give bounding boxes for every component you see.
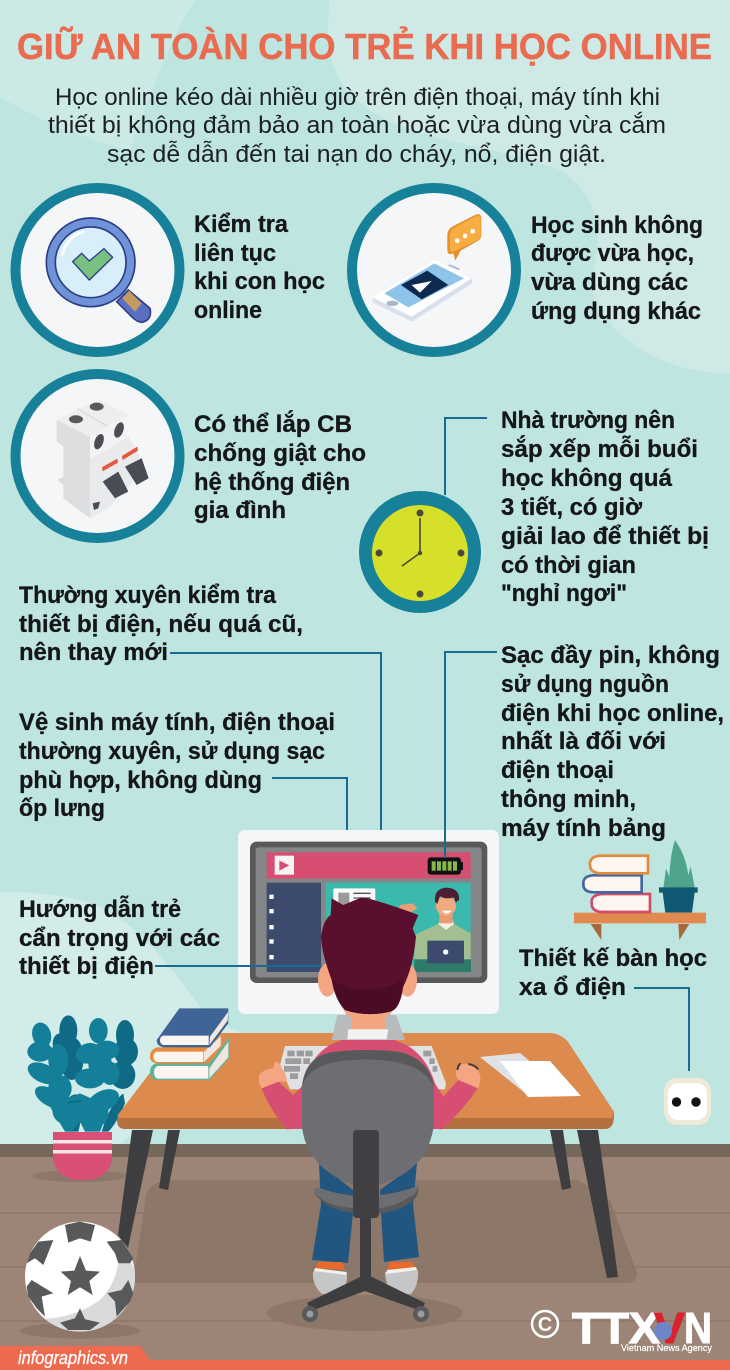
text: school schedule: "nghỉ ngơi" bbox=[501, 580, 627, 607]
logo: TTXVN: TTX bbox=[572, 1304, 660, 1353]
chair seat bbox=[314, 1186, 418, 1213]
text: charge battery: Sạc đầy pin, không bbox=[501, 642, 720, 669]
panel: check continuously bbox=[16, 188, 180, 352]
intro paragraph: Học online kéo dài nhiều giờ trên điện thoại, máy tính khi bbox=[55, 84, 660, 111]
icon: magnifying glass bbox=[46, 218, 151, 322]
text: clean devices: Vệ sinh máy tính, điện thoại bbox=[19, 709, 335, 736]
jeans bbox=[312, 1163, 419, 1263]
logo: TTXVN: Vietnam News Agency bbox=[621, 1343, 712, 1353]
icon: keyboard bbox=[280, 1046, 446, 1089]
text: check continuously: liên tục bbox=[194, 240, 276, 267]
text: check continuously: khi con học bbox=[194, 268, 325, 295]
text: school schedule: học không quá bbox=[501, 465, 673, 492]
icon: books on desk bbox=[150, 1008, 229, 1080]
icon: soccer ball bbox=[20, 1222, 140, 1339]
text: school schedule: giải lao để thiết bị bbox=[501, 523, 709, 550]
text: phone apps bbox=[531, 212, 703, 325]
shirt and arms bbox=[259, 1037, 480, 1129]
chair shadow bbox=[267, 1295, 463, 1331]
connectors bbox=[155, 652, 689, 1071]
text: guide children: cẩn trọng với các bbox=[19, 925, 220, 952]
logo: TTXVN: N bbox=[684, 1304, 712, 1353]
floor bbox=[0, 1144, 730, 1360]
chair back bbox=[302, 1050, 434, 1218]
text: charge battery: điện khi học online, bbox=[501, 700, 724, 727]
source label: infographics.vn bbox=[18, 1348, 128, 1368]
text: charge battery: máy tính bảng bbox=[501, 815, 666, 842]
text: desk away from socket: Thiết kế bàn học bbox=[519, 945, 707, 972]
video: teacher bbox=[333, 888, 471, 972]
text: phone apps: được vừa học, bbox=[531, 240, 694, 267]
text: clean devices: ốp lưng bbox=[19, 795, 105, 822]
footer bar bbox=[0, 1346, 730, 1370]
shoes bbox=[313, 1262, 418, 1294]
panel: phone apps bbox=[352, 188, 516, 352]
text: clean devices: thường xuyên, sử dụng sạc bbox=[19, 738, 325, 765]
icon: circuit breaker bbox=[57, 400, 149, 518]
text: guide children: thiết bị điện bbox=[19, 953, 154, 980]
logo: TTXVN bbox=[532, 1304, 712, 1353]
icon: clock bbox=[359, 491, 481, 613]
text: guide children: Hướng dẫn trẻ bbox=[19, 895, 181, 923]
text: circuit breaker: hệ thống điện bbox=[194, 469, 350, 496]
icon: potted plant bbox=[24, 1015, 138, 1182]
text: charge battery: nhất là đối với bbox=[501, 728, 666, 755]
text: circuit breaker: gia đình bbox=[194, 497, 286, 524]
student bbox=[259, 897, 480, 1331]
text: phone apps: Học sinh không bbox=[531, 212, 703, 239]
text: desk away from socket bbox=[519, 945, 707, 1001]
text: clean devices bbox=[19, 709, 335, 822]
text: check equipment bbox=[19, 582, 303, 666]
head bbox=[318, 897, 418, 1040]
text: check continuously bbox=[194, 211, 325, 324]
text: phone apps: ứng dụng khác bbox=[531, 298, 701, 325]
text: school schedule: sắp xếp mỗi buổi bbox=[501, 435, 698, 463]
text: check equipment: thiết bị điện, nếu quá cũ, bbox=[19, 611, 303, 638]
icon: battery bbox=[428, 857, 463, 875]
title: GIỮ AN TOÀN CHO TRẺ KHI HỌC ONLINE bbox=[17, 25, 712, 67]
text: school schedule bbox=[501, 407, 709, 607]
icon: wall shelf with books and plant bbox=[574, 840, 706, 940]
intro paragraph: sạc dễ dẫn đến tai nạn do cháy, nổ, điện giật. bbox=[107, 141, 606, 168]
text: charge battery: thông minh, bbox=[501, 786, 636, 813]
icon: papers on desk bbox=[480, 1053, 581, 1097]
panel: circuit breaker bbox=[16, 374, 180, 538]
icon: wall socket bbox=[664, 1078, 711, 1125]
text: guide children bbox=[19, 895, 220, 980]
text: school schedule: Nhà trường nên bbox=[501, 407, 675, 434]
text: phone apps: vừa dùng các bbox=[531, 269, 688, 296]
logo: TTXVN: C bbox=[538, 1314, 552, 1336]
text: school schedule: có thời gian bbox=[501, 552, 636, 579]
text: circuit breaker: Có thể lắp CB bbox=[194, 410, 352, 438]
chair base bbox=[302, 1215, 429, 1322]
icon: phone with chat bubble bbox=[373, 214, 481, 322]
text: circuit breaker: chống giật cho bbox=[194, 440, 366, 467]
text: check equipment: nên thay mới bbox=[19, 639, 168, 666]
text: school schedule: 3 tiết, có giờ bbox=[501, 494, 643, 521]
text: charge battery: sử dụng nguồn bbox=[501, 671, 669, 698]
text: circuit breaker bbox=[194, 410, 366, 524]
text: check equipment: Thường xuyên kiểm tra bbox=[19, 582, 277, 609]
icon: desk bbox=[117, 1033, 618, 1278]
text: desk away from socket: xa ổ điện bbox=[519, 974, 626, 1001]
intro paragraph: thiết bị không đảm bảo an toàn hoặc vừa dùng vừa cắm bbox=[48, 112, 666, 139]
text: check continuously: online bbox=[194, 297, 262, 324]
intro paragraph bbox=[48, 84, 666, 168]
text: charge battery: điện thoại bbox=[501, 757, 614, 784]
text: clean devices: phù hợp, không dùng bbox=[19, 767, 262, 794]
icon: monitor bbox=[238, 830, 499, 1014]
connector: clock bbox=[445, 418, 487, 495]
logo: TTXVN: V bbox=[654, 1304, 686, 1353]
text: charge battery bbox=[501, 642, 724, 842]
text: check continuously: Kiểm tra bbox=[194, 211, 289, 238]
